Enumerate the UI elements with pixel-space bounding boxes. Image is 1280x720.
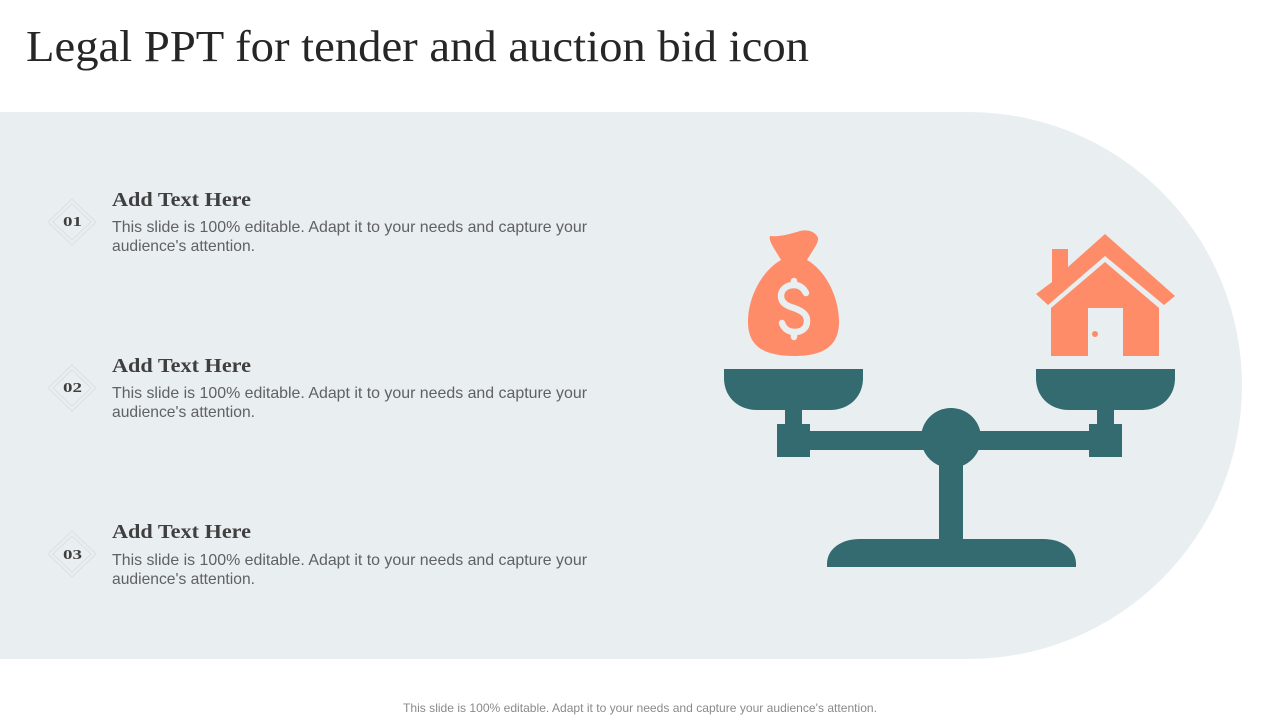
left pan bbox=[724, 369, 863, 410]
text block bbox=[112, 219, 588, 255]
heading: Add Text Here bbox=[112, 521, 251, 543]
right pan bbox=[1036, 369, 1175, 410]
text block: This slide is 100% editable. Adapt it to your needs and capture your bbox=[112, 385, 588, 402]
list item 03 bbox=[48, 521, 588, 588]
footer note: This slide is 100% editable. Adapt it to your needs and capture your audience's attention. bbox=[403, 701, 877, 715]
heading: Add Text Here bbox=[112, 189, 251, 211]
text block bbox=[112, 552, 588, 588]
badge: 03 bbox=[48, 531, 96, 577]
icon: house bbox=[1036, 234, 1175, 356]
house body bbox=[1051, 262, 1159, 356]
dollar sign bbox=[781, 281, 807, 337]
badge: 03: 03 bbox=[63, 548, 82, 563]
list item 02 bbox=[48, 355, 588, 421]
pivot bbox=[921, 408, 981, 468]
base bbox=[827, 539, 1076, 567]
badge: 01 bbox=[48, 199, 96, 245]
title: Legal PPT for tender and auction bid icon bbox=[26, 22, 809, 71]
icon: money bag bbox=[748, 230, 839, 356]
text block: audience's attention. bbox=[112, 238, 255, 255]
list item 01 bbox=[48, 189, 588, 255]
text block: audience's attention. bbox=[112, 404, 255, 421]
icon: balance scale bbox=[724, 369, 1175, 567]
post bbox=[939, 460, 963, 542]
badge: 02: 02 bbox=[63, 381, 82, 396]
door knob bbox=[1092, 331, 1098, 337]
text block: audience's attention. bbox=[112, 571, 255, 588]
heading: Add Text Here bbox=[112, 355, 251, 377]
text block: This slide is 100% editable. Adapt it to your needs and capture your bbox=[112, 219, 588, 236]
badge: 01: 01 bbox=[63, 215, 82, 230]
text block bbox=[112, 385, 588, 421]
badge: 02 bbox=[48, 365, 96, 411]
beam and joints bbox=[777, 410, 1122, 457]
panel: background bbox=[0, 112, 1242, 659]
roof and chimney bbox=[1036, 234, 1175, 305]
text block: This slide is 100% editable. Adapt it to your needs and capture your bbox=[112, 552, 588, 569]
